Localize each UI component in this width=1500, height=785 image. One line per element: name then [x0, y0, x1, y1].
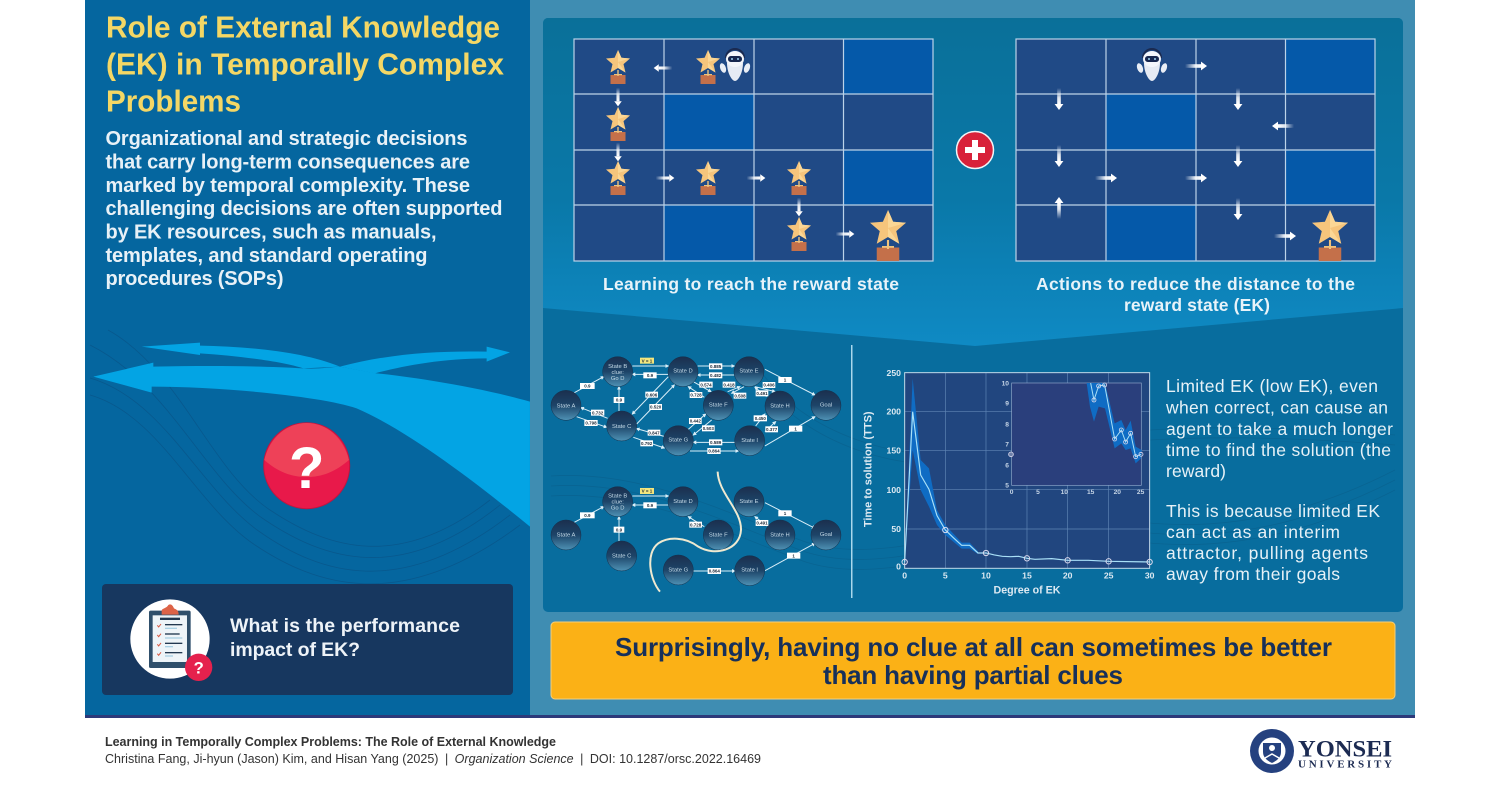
- x ticks: 10: [981, 570, 991, 580]
- upper network edge labels: 0.847: [648, 430, 660, 435]
- upper network edge labels: V = 1: [642, 358, 653, 363]
- caption: actions: [1036, 274, 1355, 315]
- lower network node labels: Go D: [611, 506, 624, 512]
- diagram: state networks: [551, 357, 841, 592]
- x ticks: [902, 570, 1155, 580]
- citation: Christina Fang, Ji-hyun (Jason) Kim, and Hisan Yang (2025) | Organization Science | DOI: 10.1287/orsc.2022.16469: [105, 752, 761, 766]
- x ticks: 20: [1063, 570, 1073, 580]
- text: limited EK explanation: [1165, 376, 1393, 584]
- upper network node labels: Goal: [820, 403, 832, 409]
- caption: actions: reward state (EK): [1124, 295, 1270, 315]
- upper network edge labels: 0.728: [690, 393, 702, 398]
- upper network node labels: Go D: [611, 376, 624, 382]
- inset chart: 9: [1005, 401, 1009, 408]
- intro text: marked by temporal complexity. These: [106, 175, 470, 197]
- logo: Yonsei University: UNIVERSITY: [1298, 758, 1392, 770]
- upper network edge labels: 0.589: [710, 440, 722, 445]
- callout: key finding: than having partial clues: [823, 660, 1123, 690]
- inset chart: 5: [1005, 483, 1009, 490]
- icon: question mark button: ?: [289, 436, 324, 501]
- inset chart: 8: [1005, 421, 1009, 428]
- upper network node labels: State H: [770, 403, 790, 409]
- lower network edge labels: 1: [792, 553, 795, 558]
- intro text: procedures (SOPs): [106, 268, 284, 290]
- lower network edge labels: V = 1: [642, 489, 653, 494]
- upper network edge labels: 0.442: [690, 419, 701, 424]
- y ticks: [887, 368, 901, 571]
- lower network node labels: State C: [612, 553, 631, 559]
- lower network node labels: Goal: [820, 532, 832, 538]
- upper network edge labels: 1: [794, 426, 797, 431]
- lower network node labels: State D: [673, 499, 693, 505]
- upper network edges: [574, 366, 815, 451]
- icon: clipboard: [130, 599, 212, 681]
- inset chart: 25: [1137, 489, 1145, 496]
- inset chart: 15: [1087, 489, 1095, 496]
- lower network node labels: State G: [668, 567, 689, 573]
- panel: main content: [543, 18, 1403, 612]
- icon: main path arrow: [93, 363, 530, 527]
- upper network node labels: State F: [709, 403, 728, 409]
- upper network edge labels: 0.482: [710, 373, 722, 378]
- upper network node labels: [557, 364, 832, 444]
- upper network edge labels: [580, 358, 802, 454]
- title: (EK) in Temporally Complex: [106, 46, 505, 82]
- y ticks: 0: [896, 561, 901, 571]
- footer rule: [85, 715, 1415, 718]
- arrows: [614, 64, 854, 238]
- upper network edge labels: 0.377: [766, 427, 778, 432]
- stars: [606, 50, 906, 261]
- wave lines: [90, 330, 520, 584]
- right background frame: [530, 0, 1415, 715]
- text: limited EK explanation: time to find the solution (the: [1166, 440, 1391, 460]
- data points: [902, 527, 1152, 565]
- text: limited EK explanation: Limited EK (low EK), even: [1166, 376, 1378, 396]
- x ticks: 0: [902, 570, 907, 580]
- intro text: [106, 128, 502, 290]
- text: limited EK explanation: away from their goals: [1166, 564, 1340, 584]
- question text: impact of EK?: [230, 639, 360, 661]
- divider: [851, 345, 852, 598]
- lower network edge labels: 0.9: [647, 503, 654, 508]
- text: limited EK explanation: can act as an interim: [1166, 522, 1340, 542]
- upper network node labels: State I: [741, 438, 758, 444]
- upper network edge labels: 0.9: [584, 384, 591, 389]
- upper network edge labels: 0.732: [592, 410, 604, 415]
- text: limited EK explanation: agent to take a much longer: [1166, 419, 1393, 439]
- lower network edge labels: 0.491: [756, 521, 768, 526]
- wave lines: [551, 370, 1395, 569]
- axes border: [905, 373, 1150, 568]
- lower network edges: [574, 496, 815, 571]
- inset chart: 0: [1010, 489, 1014, 496]
- lower network node labels: State B: [608, 493, 627, 499]
- citation: [105, 735, 761, 766]
- icon: clipboard: ?: [194, 658, 204, 677]
- upper network edge labels: 0.9: [647, 373, 654, 378]
- lower network nodes: [551, 487, 841, 586]
- icon: right arrow: [340, 347, 510, 373]
- upper network node labels: State D: [673, 368, 693, 374]
- upper network edge labels: 0.798: [585, 421, 597, 426]
- icon: plus: [956, 132, 994, 168]
- title: Problems: [106, 84, 241, 118]
- callout: key finding: Surprisingly, having no clue at all can sometimes be better: [615, 632, 1332, 662]
- upper network node labels: State B: [608, 364, 627, 370]
- icon: question mark button: [264, 423, 350, 509]
- text: limited EK explanation: reward): [1166, 461, 1226, 481]
- question text: [230, 615, 460, 661]
- inset chart: 7: [1005, 442, 1009, 449]
- x ticks: 15: [1022, 570, 1032, 580]
- line series: [905, 412, 1150, 562]
- question text: What is the performance: [230, 615, 460, 637]
- panel: performance question: [102, 584, 513, 695]
- y ticks: 100: [887, 485, 901, 495]
- panel: left intro: [85, 0, 530, 715]
- y ticks: 250: [887, 368, 901, 378]
- y ticks: 50: [891, 524, 901, 534]
- confidence band: [905, 378, 978, 563]
- lower network edge labels: 0.864: [709, 569, 720, 574]
- upper network node labels: clue:: [612, 370, 624, 376]
- inset chart: 10: [1061, 489, 1068, 496]
- upper network node labels: State E: [739, 368, 759, 374]
- logo: Yonsei University: [1250, 729, 1392, 773]
- upper network edge labels: 0.418: [723, 382, 735, 387]
- icon: robot: [719, 49, 751, 81]
- upper network nodes: [551, 357, 841, 456]
- upper network edge labels: 0.606: [646, 392, 658, 397]
- intro text: challenging decisions are often supported: [106, 198, 502, 220]
- upper network edge labels: 0.491: [756, 391, 768, 396]
- y ticks: 200: [887, 407, 901, 417]
- upper network edge labels: 0.450: [755, 416, 766, 421]
- intro text: by EK resources, such as manuals,: [106, 222, 436, 244]
- upper network edge labels: 0.503: [703, 426, 714, 431]
- icon: star reward: [1312, 210, 1348, 261]
- upper network edge labels: 1: [784, 378, 787, 383]
- lower network edge labels: 0.9: [616, 527, 623, 532]
- lower network node labels: State F: [709, 532, 728, 538]
- title: Role of External Knowledge: [106, 10, 500, 44]
- lower network node labels: State H: [770, 532, 790, 538]
- upper network edge labels: 0.792: [641, 441, 653, 446]
- upper network edge labels: 0.520: [650, 405, 662, 410]
- inset chart: 6: [1005, 462, 1009, 469]
- intro text: that carry long-term consequences are: [106, 152, 470, 174]
- lower network node labels: [557, 493, 832, 574]
- lower network node labels: clue:: [612, 499, 624, 505]
- x ticks: 25: [1104, 570, 1114, 580]
- text: limited EK explanation: This is because limited EK: [1166, 501, 1380, 521]
- lower network edge labels: 1: [784, 511, 787, 516]
- y ticks: 150: [887, 446, 901, 456]
- y axis title: Time to solution (TTS): [863, 411, 875, 527]
- text: limited EK explanation: attractor, pulling agents: [1166, 543, 1368, 563]
- chart: time to solution: [863, 368, 1155, 596]
- inset chart: 10: [1002, 380, 1009, 387]
- lower network node labels: State A: [557, 533, 576, 539]
- x ticks: 30: [1145, 570, 1155, 580]
- x ticks: 5: [943, 570, 948, 580]
- inset chart: 20: [1114, 489, 1121, 496]
- x axis title: Degree of EK: [994, 584, 1061, 596]
- inset chart: [1002, 380, 1145, 496]
- citation: Learning in Temporally Complex Problems: The Role of External Knowledge: [105, 735, 556, 749]
- barrier curve: [650, 472, 741, 592]
- lower network edge labels: [580, 488, 800, 574]
- title: [106, 10, 505, 118]
- upper network edge labels: 0.885: [710, 364, 722, 369]
- grid: learning to reach reward: [574, 39, 933, 261]
- icon: robot: [1136, 49, 1168, 81]
- logo: Yonsei University: YONSEI: [1298, 736, 1392, 762]
- upper network edge labels: 0.508: [734, 393, 746, 398]
- callout: key finding: [551, 622, 1395, 699]
- grid: actions to reduce distance: [1016, 39, 1375, 261]
- caption: actions: Actions to reduce the distance to the: [1036, 274, 1355, 294]
- intro text: Organizational and strategic decisions: [106, 128, 468, 150]
- lower network edge labels: 0.728: [690, 522, 702, 527]
- lower network edge labels: 0.9: [584, 513, 591, 518]
- upper network edge labels: 0.574: [700, 382, 712, 387]
- lower network node labels: State E: [739, 499, 759, 505]
- upper network node labels: State C: [612, 424, 631, 430]
- upper network edge labels: 0.864: [708, 449, 720, 454]
- icon: upper-left arrow: [142, 343, 340, 368]
- arrows: [1055, 62, 1296, 240]
- intro text: templates, and standard operating: [106, 245, 428, 267]
- upper network node labels: State G: [668, 437, 689, 443]
- upper network edge labels: 0.406: [763, 383, 775, 388]
- inset chart: 5: [1036, 489, 1040, 496]
- light band: [543, 18, 1403, 346]
- grid lines: [905, 373, 1150, 568]
- upper network edge labels: 0.9: [616, 398, 623, 403]
- text: limited EK explanation: when correct, can cause an: [1165, 398, 1388, 418]
- upper network node labels: State A: [557, 403, 576, 409]
- caption: learning: Learning to reach the reward state: [603, 274, 899, 294]
- lower network node labels: State I: [741, 568, 758, 574]
